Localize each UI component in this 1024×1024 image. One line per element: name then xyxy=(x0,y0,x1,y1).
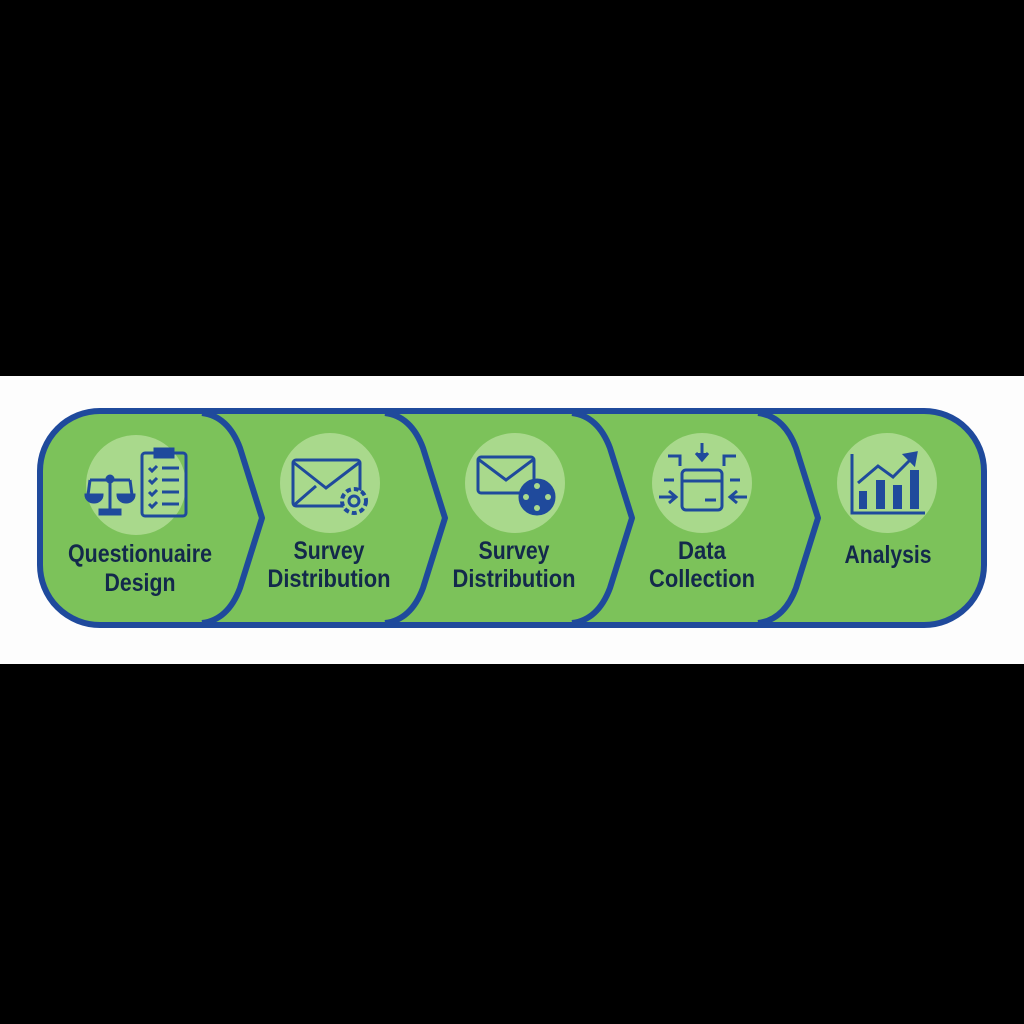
step 4: Data Collection xyxy=(649,433,755,593)
step 5: Analysis: Analysis xyxy=(844,541,932,569)
process flow pill xyxy=(40,411,984,625)
step 1: Questionnaire Design: Questionuaire xyxy=(68,540,212,568)
step 3: Survey Distribution: Survey xyxy=(478,537,550,565)
step 2: Survey Distribution xyxy=(268,433,390,593)
icon: envelope with network node xyxy=(478,457,554,514)
white band background xyxy=(0,376,1024,664)
step 3: Survey Distribution xyxy=(452,433,576,593)
step 1: Questionnaire Design xyxy=(68,435,212,597)
chevron dividers xyxy=(202,413,818,623)
icon: envelope with gear xyxy=(293,460,366,513)
step 2: Survey Distribution: Distribution xyxy=(268,565,390,593)
icon: bar chart with trend arrow xyxy=(852,453,925,513)
icon: scales and clipboard xyxy=(86,449,186,516)
step 2: Survey Distribution: Survey xyxy=(294,537,365,565)
step 5: Analysis xyxy=(837,433,937,569)
step 4: Data Collection: Data xyxy=(678,537,727,565)
step 1: Questionnaire Design: Design xyxy=(104,569,176,597)
step 3: Survey Distribution: Distribution xyxy=(452,565,576,593)
step 4: Data Collection: Collection xyxy=(649,565,755,593)
icon: inbox with arrows xyxy=(659,443,747,510)
